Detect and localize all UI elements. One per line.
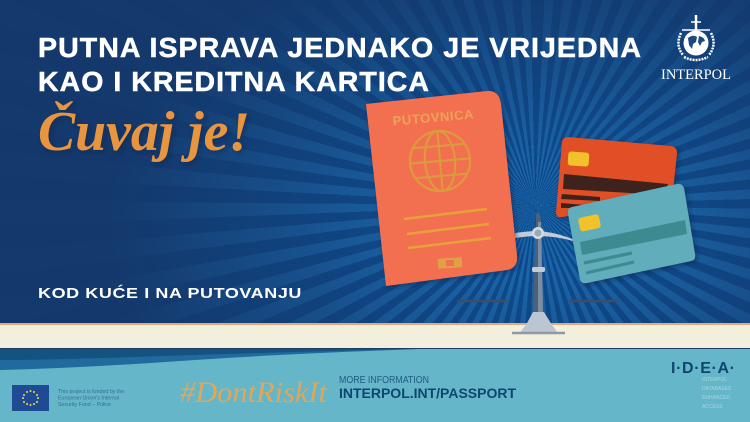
icon: passport globe [407,128,473,194]
EU funding text: Security Fund – Police [58,402,111,408]
IDEA subtext: DATABASES [702,386,732,392]
IDEA subtext: ENHANCED [702,395,730,401]
title [38,32,642,97]
title: KAO I KREDITNA KARTICA [38,66,430,97]
logo wordmark: INTERPOL [661,67,731,83]
logo: IDEA: I·D·E·A· [671,360,735,377]
background: blue sunburst rays [0,0,750,326]
IDEA subtext: ACCESS [702,404,723,410]
logo: IDEA [671,360,735,410]
logo: EU flag [12,385,49,411]
url: INTERPOL.INT/PASSPORT [339,386,517,401]
passport lines [404,209,491,248]
IDEA subtext: INTERPOL [702,377,727,383]
logo: INTERPOL [661,15,731,83]
passport label: PUTOVNICA [392,106,475,128]
illustration: passport [366,91,517,286]
footer: cream band [0,323,750,350]
EU funding text: This project is funded by the [58,389,124,395]
EU funding text: European Union's Internal [58,396,119,402]
illustration: red credit card [556,137,677,217]
icon: passport chip [438,257,462,269]
hashtag: #DontRiskIt [180,376,328,409]
illustration: balance scale [457,212,617,333]
IDEA subtext [702,377,732,410]
subheading: KOD KUĆE I NA PUTOVANJU [38,284,302,302]
footer: teal wave panel [0,349,750,422]
more information: MORE INFORMATION [339,374,429,386]
EU funding text [58,389,124,408]
slogan: Čuvaj je!: Čuvaj je! [38,100,250,163]
illustration: blue credit card [568,184,695,283]
icon: interpol emblem [678,15,714,60]
title: PUTNA ISPRAVA JEDNAKO JE VRIJEDNA [38,32,642,63]
